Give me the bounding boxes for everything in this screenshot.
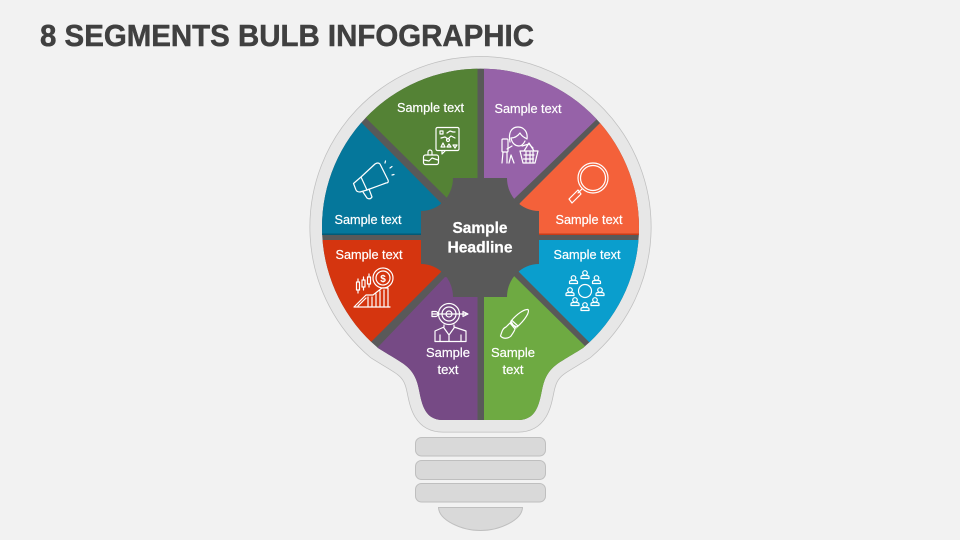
icon: woman shopping [502,127,538,163]
bulb base bar 2 [416,460,546,480]
label: light green [491,345,535,377]
segment: orange [520,123,639,235]
label: cyan: Sample text [554,247,621,262]
label: light green: Sample [491,345,535,360]
label: red: Sample text [336,247,403,262]
segment: light green [484,276,585,420]
title: 8 SEGMENTS BULB INFOGRAPHIC [40,18,534,53]
icon: strategy board [424,128,459,164]
bulb segments [322,68,639,420]
center headline: Headline [448,240,513,256]
icon: megaphone [354,161,394,199]
icon: coin chart [354,268,393,307]
icon: team circle [566,271,604,310]
center headline [421,178,539,297]
label: purple top: Sample text [494,101,562,116]
edge shade: blue [322,234,421,235]
label: orange: Sample text [556,212,623,227]
label: green top: Sample text [397,100,464,115]
bulb outer ring [322,69,639,420]
label: dark purple: text [438,362,459,377]
icon: coin chart: $ [380,274,386,285]
icon: magnifier [569,163,608,203]
label: dark purple [426,345,470,377]
segment: purple top [484,68,597,199]
icon: target person [432,304,468,342]
segment: blue [322,122,441,235]
segment: dark purple [378,277,478,420]
bulb base bar 1 [416,438,546,456]
bulb base cap [438,508,522,530]
icon: paint brush [500,309,528,338]
segment: green top [366,68,478,198]
label: blue: Sample text [334,212,402,227]
segment: cyan [518,240,638,342]
edge shade: orange [539,234,639,235]
segment: red [322,240,442,342]
label: light green: text [503,362,524,377]
label: dark purple: Sample [426,345,470,360]
center headline: Sample [452,220,508,237]
bulb base bar 3 [416,484,546,502]
